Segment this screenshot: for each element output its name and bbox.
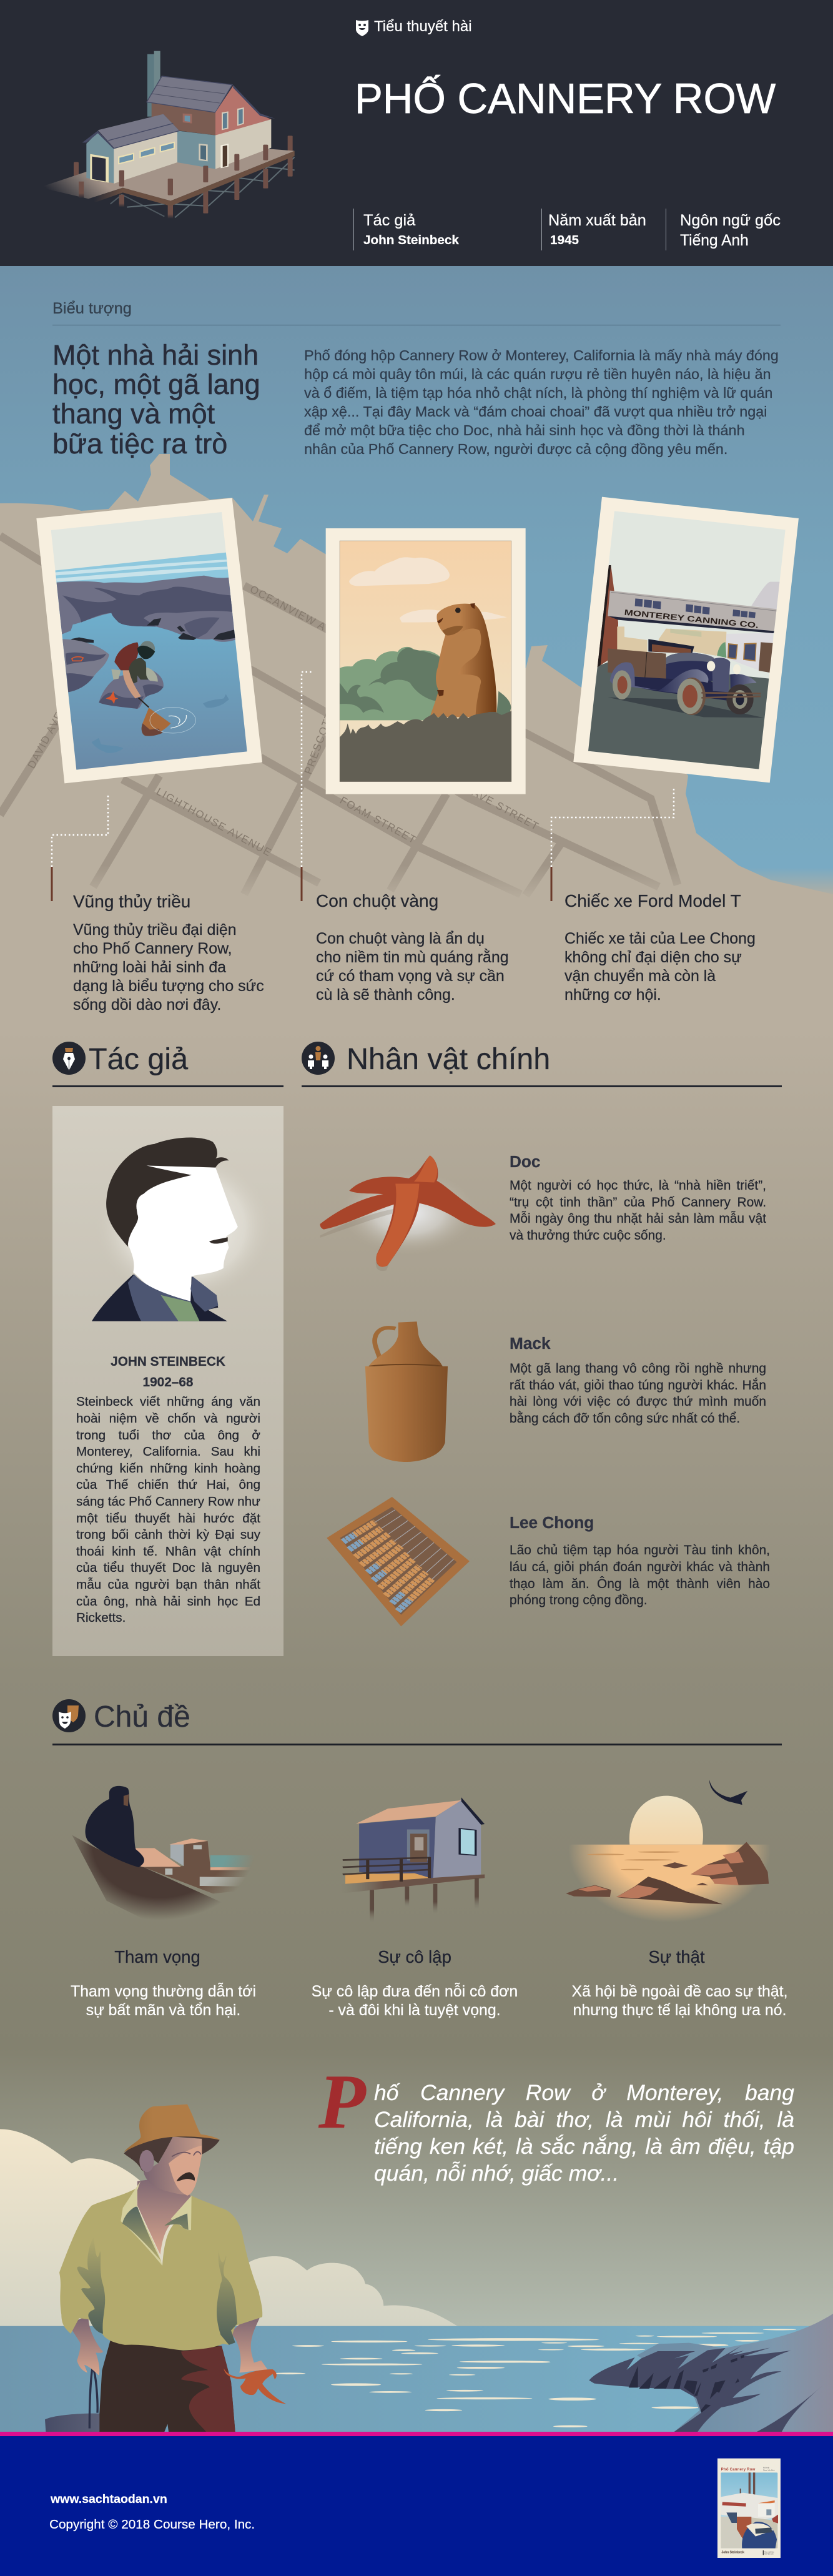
icon: comedy and tragedy masks bbox=[52, 1699, 86, 1732]
author name: 1902–68 bbox=[143, 1375, 193, 1389]
meta: language bbox=[666, 209, 785, 250]
map background with streets bbox=[0, 266, 833, 894]
headline: Một nhà hải sinh bbox=[52, 339, 259, 371]
metadata row bbox=[353, 209, 781, 250]
meta: year bbox=[541, 209, 661, 250]
symbol text: tide pool: dạng là biểu tượng cho sức bbox=[73, 977, 264, 995]
symbol text: truck: không chỉ đại diện cho sự bbox=[564, 949, 742, 966]
illustration: clay jug bbox=[365, 1321, 448, 1462]
theme illustration: ambition bbox=[72, 1786, 248, 1917]
book cover: Hội Nhà văn bbox=[764, 2553, 774, 2555]
map background with streets: LIGHTHOUSE AVENUE bbox=[154, 786, 274, 859]
theme: truth text: Sự thật bbox=[648, 1947, 705, 1967]
symbol text: tide pool: Vũng thủy triều đại diện bbox=[73, 921, 237, 939]
author biography: của Thế chiến thứ Hai, ông bbox=[76, 1478, 260, 1492]
book cover: Phố Cannery Row bbox=[721, 2467, 756, 2472]
character: Lee Chong: Lee Chong bbox=[510, 1513, 594, 1532]
character: Doc: Mỗi ngày ông thu nhặt hải sản làm mẫu vật bbox=[510, 1212, 766, 1226]
symbol text: gopher: cù là sẽ thành công. bbox=[316, 986, 455, 1004]
theme: isolation text: - và đôi khi là tuyệt vọng. bbox=[328, 2001, 501, 2019]
author portrait bbox=[92, 1138, 255, 1321]
intro paragraph: hộp cá mòi quây tôn múi, là các quán rượu rẻ tiền huyên náo, là hiệu ăn bbox=[304, 366, 771, 382]
intro paragraph: xập xệ... Tại đây Mack và “đám choai choai” đã vượt qua nhiều trở ngại bbox=[304, 403, 767, 420]
icon: pen nib bbox=[52, 1042, 86, 1075]
theme: truth text: Xã hội bề ngoài đề cao sự thật, bbox=[571, 1983, 788, 2000]
theme illustration: truth bbox=[566, 1780, 769, 1920]
theme: truth text bbox=[571, 1947, 788, 2019]
intro paragraph: nhân của Phố Cannery Row, người được cả cộng đồng yêu mến. bbox=[304, 441, 727, 457]
character: Lee Chong: láu cá, giỏi phán đoán người khác và thành bbox=[510, 1560, 770, 1574]
quote bbox=[374, 2080, 794, 2186]
meta: author: Tác giả bbox=[363, 212, 415, 229]
symbol text: truck: Chiếc xe Ford Model T bbox=[564, 891, 741, 910]
intro paragraph: Phố đóng hộp Cannery Row ở Monterey, California là mấy nhà máy đóng bbox=[304, 347, 779, 363]
background: clouds and sea bbox=[0, 2129, 810, 2432]
intro paragraph bbox=[304, 347, 779, 457]
heading: main characters bbox=[302, 1042, 782, 1087]
symbol text: tide pool bbox=[73, 892, 264, 1014]
symbol text: gopher: cho niềm tin mù quáng rằng bbox=[316, 949, 509, 966]
section: author bbox=[52, 1042, 283, 1656]
character: Mack: Mack bbox=[510, 1334, 551, 1353]
photo: Ford Model T bbox=[573, 497, 799, 783]
genre label: Tiểu thuyết hài bbox=[374, 18, 472, 35]
book cover: Mã Nhật bbox=[763, 2467, 769, 2469]
meta: year: 1945 bbox=[550, 233, 579, 247]
photo: tide pool bbox=[36, 498, 262, 783]
quote: quán, nỗi nhớ, giấc mơ... bbox=[374, 2161, 619, 2186]
callout connector: truck bbox=[551, 789, 674, 901]
theme: isolation text bbox=[312, 1947, 518, 2019]
symbol text: truck: vận chuyển mà còn là bbox=[564, 967, 716, 985]
author biography: của tiểu thuyết Doc là nguyên bbox=[76, 1561, 260, 1575]
author biography: mẫu của người bạn thân nhất bbox=[76, 1577, 260, 1592]
meta: author bbox=[353, 209, 535, 250]
author biography: trong bối cảnh thời kỳ Đại suy bbox=[76, 1527, 260, 1542]
meta: year: Năm xuất bản bbox=[548, 212, 646, 229]
book cover: Nhà xuất bản bbox=[764, 2550, 774, 2553]
theme: isolation text: Sự cô lập bbox=[378, 1947, 451, 1967]
theme: ambition text: Tham vọng bbox=[114, 1947, 200, 1967]
title: PHỐ CANNERY ROW bbox=[355, 76, 776, 122]
map background with streets: PRESCOTT bbox=[302, 711, 336, 776]
character: Mack: rất tháo vát, giỏi thao túng người khác. Hắn bbox=[510, 1378, 766, 1393]
character: Doc: Một người có học thức, là “nhà hiền triết”, bbox=[510, 1178, 766, 1193]
author biography: thoái kinh tế. Nhân vật chính bbox=[76, 1544, 260, 1559]
map background with streets: OCEANVIEW AVE bbox=[248, 583, 342, 641]
illustration: man with starfish and bucket bbox=[45, 2105, 286, 2432]
headline bbox=[52, 339, 260, 460]
meta: language: Tiếng Anh bbox=[680, 232, 749, 249]
author biography: một tiểu thuyết hài hước đặt bbox=[76, 1511, 260, 1526]
theme: ambition text: Tham vọng thường dẫn tới bbox=[71, 1983, 256, 2000]
illustration: cannery house on pier bbox=[47, 51, 295, 218]
section: main characters bbox=[302, 1042, 782, 1626]
header band bbox=[0, 0, 833, 266]
meta: language: Ngôn ngữ gốc bbox=[680, 212, 781, 229]
author biography: trong tuổi thơ của ông ở bbox=[76, 1428, 260, 1443]
quote: hố Cannery Row ở Monterey, bang bbox=[374, 2080, 794, 2105]
character: Lee Chong: phóng trong cộng đồng. bbox=[510, 1593, 648, 1607]
book cover: John Steinbeck bbox=[721, 2551, 744, 2555]
meta: author: John Steinbeck bbox=[363, 233, 459, 247]
photo: gopher bbox=[326, 528, 526, 794]
heading: author bbox=[52, 1042, 283, 1087]
character: Doc: và thưởng thức cuộc sống. bbox=[510, 1228, 666, 1243]
book cover bbox=[717, 2458, 781, 2558]
author name bbox=[111, 1355, 225, 1389]
intro paragraph: để mở một bữa tiệc cho Doc, nhà hải sinh học và đồng thời là thánh bbox=[304, 422, 745, 438]
character: Lee Chong bbox=[510, 1513, 770, 1607]
theme: isolation text: Sự cô lập đưa đến nỗi cô đơn bbox=[312, 1983, 518, 2000]
author biography: Monterey, California. Sau khi bbox=[76, 1444, 260, 1459]
callout connector: gopher bbox=[301, 671, 311, 901]
character: Mack: hài lòng với việc có được thứ mình muốn bbox=[510, 1394, 766, 1409]
photo: Ford Model T: MONTEREY CANNING CO. bbox=[624, 608, 759, 630]
character: Mack: Một gã lang thang vô công rồi nghề nhưng bbox=[510, 1361, 766, 1376]
author biography bbox=[76, 1394, 260, 1625]
icon: theatre mask bbox=[356, 20, 368, 36]
illustration: headland cliff bbox=[526, 2314, 833, 2432]
closing scene with sea and quote bbox=[0, 2059, 833, 2432]
callout connector: tide pool bbox=[51, 796, 109, 901]
heading: author: Tác giả bbox=[89, 1042, 188, 1076]
map background with streets: WAVE STREET bbox=[461, 781, 541, 833]
headline: học, một gã lang bbox=[52, 368, 260, 400]
panel: author profile bbox=[52, 1106, 283, 1656]
section label: Biểu tượng bbox=[52, 300, 132, 317]
illustration: starfish bbox=[320, 1155, 496, 1271]
character: Lee Chong: thạo làm ăn. Ông là một thành viên hào bbox=[510, 1577, 770, 1591]
quote: tiếng ken két, là sắc nắng, là âm điệu, tập bbox=[374, 2134, 794, 2159]
map background with streets: DAVID AVE bbox=[26, 709, 66, 771]
author biography: của ông, nhà hải sinh học Ed bbox=[76, 1594, 260, 1609]
theme illustration: isolation bbox=[342, 1797, 485, 1918]
character: Doc: Doc bbox=[510, 1152, 540, 1171]
illustration: abacus bbox=[327, 1497, 470, 1626]
symbol text: gopher: cứ có tham vọng và sự cần bbox=[316, 967, 505, 985]
symbol text: truck: những cơ hội. bbox=[564, 986, 661, 1004]
heading: main characters: Nhân vật chính bbox=[347, 1042, 550, 1076]
author biography: hoài niệm về chốn và người bbox=[76, 1411, 260, 1426]
character: Doc bbox=[510, 1152, 767, 1243]
character: Mack: bằng cách đỡ tốn công sức nhất có thể. bbox=[510, 1411, 740, 1426]
author biography: Ricketts. bbox=[76, 1611, 126, 1625]
heading: themes: Chủ đề bbox=[94, 1700, 190, 1734]
symbol text: gopher: Con chuột vàng bbox=[316, 891, 438, 910]
intro paragraph: và ổ điếm, là tiệm tạp hóa nhỏ chật ních, là phòng thí nghiệm và lữ quán bbox=[304, 385, 772, 401]
theme: truth text: nhưng thực tế lại không ưa nó. bbox=[573, 2001, 786, 2019]
footer bbox=[0, 2432, 833, 2576]
footer link: www.sachtaodan.vn bbox=[51, 2492, 167, 2506]
theme: ambition text bbox=[71, 1947, 256, 2019]
copyright: Copyright © 2018 Course Hero, Inc. bbox=[49, 2517, 255, 2532]
map background with streets: FOAM STREET bbox=[338, 794, 418, 846]
symbol text: gopher: Con chuột vàng là ẩn dụ bbox=[316, 930, 485, 947]
symbol text: tide pool: cho Phố Cannery Row, bbox=[73, 940, 232, 957]
section: themes bbox=[52, 1699, 788, 2019]
drop cap: P bbox=[318, 2059, 366, 2144]
symbol text: tide pool: những loài hải sinh đa bbox=[73, 959, 226, 976]
character: Mack bbox=[510, 1334, 766, 1426]
section: symbols bbox=[0, 266, 833, 1014]
symbol text: tide pool: sống dồi dào nơi đây. bbox=[73, 996, 221, 1014]
author name: JOHN STEINBECK bbox=[111, 1355, 225, 1369]
headline: bữa tiệc ra trò bbox=[52, 428, 227, 460]
quote: California, là bài thơ, là mùi hôi thối, là bbox=[374, 2107, 794, 2132]
book cover: Phạm Văn Bình bbox=[763, 2469, 775, 2472]
author biography: Steinbeck viết những áng văn bbox=[76, 1394, 260, 1409]
icon: people bbox=[302, 1042, 335, 1075]
author biography: chứng kiến những kinh hoàng bbox=[76, 1461, 260, 1476]
theme: ambition text: sự bất mãn và tổn hại. bbox=[86, 2001, 240, 2019]
author biography: sáng tác Phố Cannery Row như bbox=[76, 1494, 260, 1509]
symbol text: truck bbox=[564, 891, 756, 1004]
heading: themes bbox=[52, 1699, 782, 1745]
symbol text: gopher bbox=[316, 891, 509, 1004]
symbol text: tide pool: Vũng thủy triều bbox=[73, 892, 190, 911]
headline: thang và một bbox=[52, 398, 215, 430]
character: Lee Chong: Lão chủ tiệm tạp hóa người Tàu tinh khôn, bbox=[510, 1543, 770, 1557]
character: Doc: “trụ cột tinh thần” của Phố Cannery Row. bbox=[510, 1195, 766, 1210]
symbol text: truck: Chiếc xe tải của Lee Chong bbox=[564, 930, 756, 947]
